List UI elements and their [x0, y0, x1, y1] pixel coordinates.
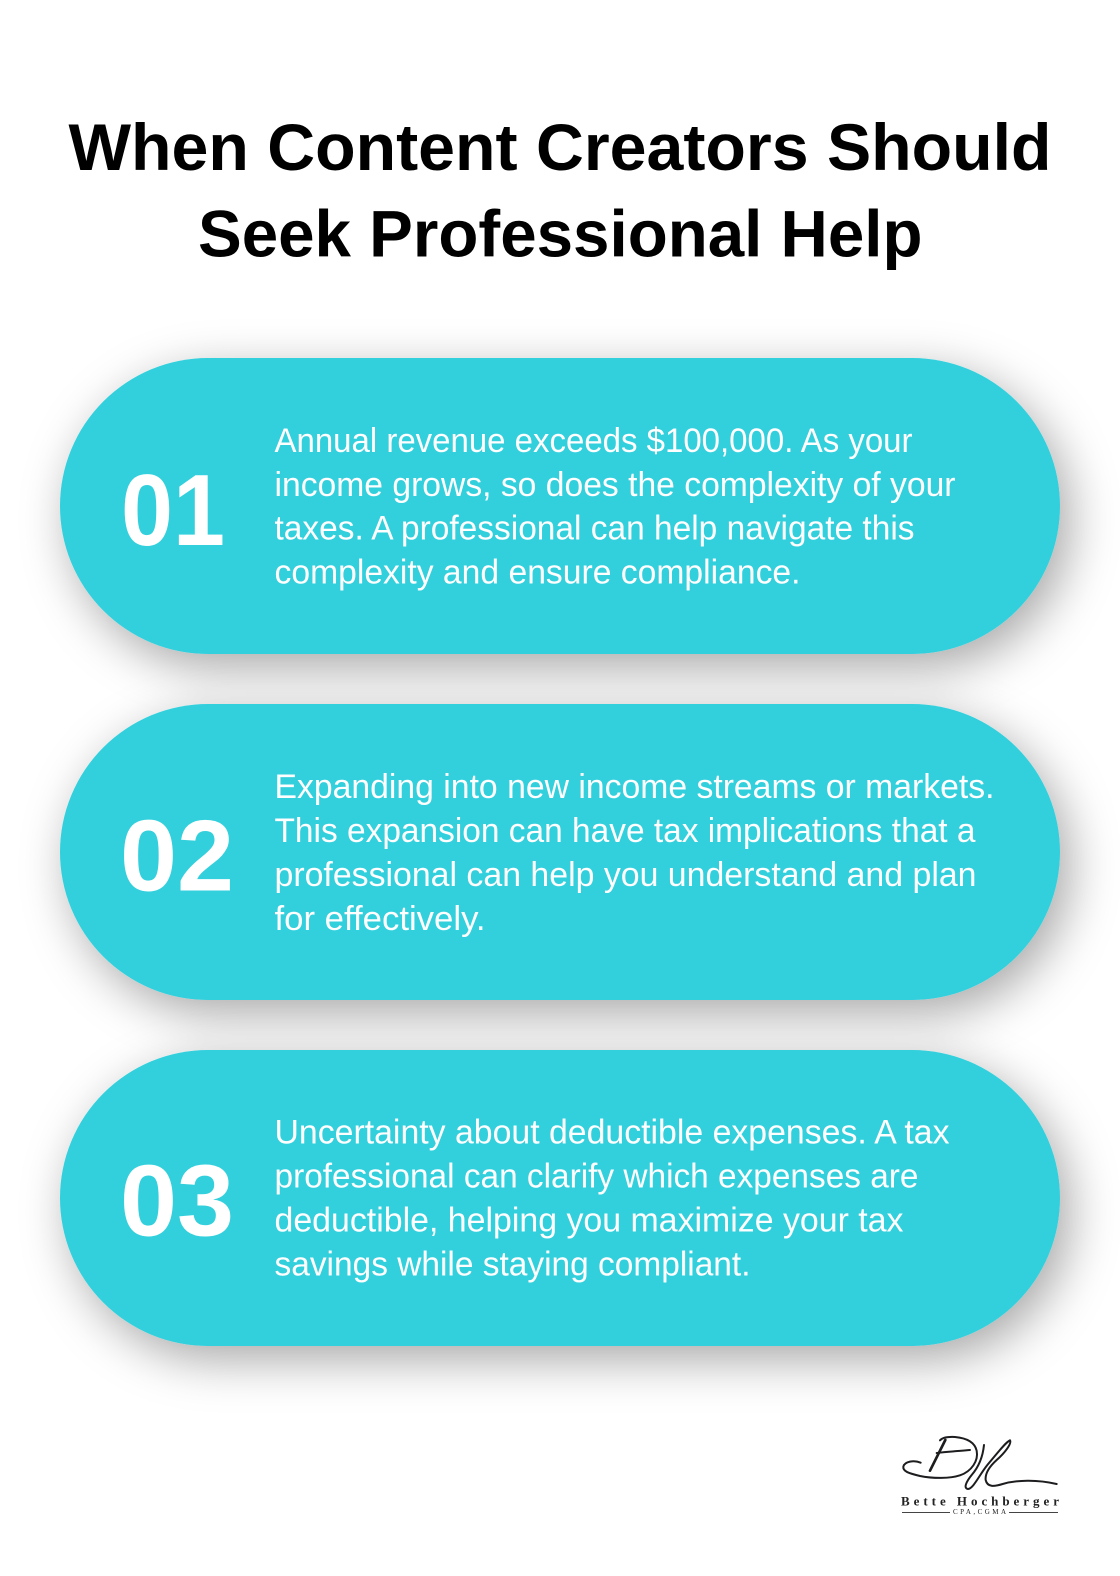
panel: step 03 [60, 1050, 1060, 1346]
logo: Bette Hochberger signature [901, 1437, 1059, 1516]
text block 02: for effectively. [274, 900, 486, 938]
text block 01: income grows, so does the complexity of your [274, 466, 956, 504]
icon: BH signature mark [903, 1437, 1057, 1489]
panel: step 01 [60, 358, 1060, 654]
title: When Content Creators Should [68, 111, 1052, 184]
pill background 02 [60, 704, 1060, 1000]
number 03: 03 [120, 1146, 234, 1258]
logo name: Bette Hochberger [901, 1494, 1059, 1508]
title [68, 111, 1052, 270]
text block 01 [274, 422, 956, 592]
text block 01: Annual revenue exceeds $100,000. As your [274, 422, 912, 460]
text block 02: Expanding into new income streams or markets. [274, 768, 994, 806]
pill background 03 [60, 1050, 1060, 1346]
title: Seek Professional Help [198, 198, 922, 270]
panel: step 02 [60, 704, 1060, 1000]
text block 03: savings while staying compliant. [274, 1246, 750, 1284]
text block 02: This expansion can have tax implications that a [274, 812, 976, 850]
text block 01: complexity and ensure compliance. [274, 554, 800, 592]
number 01: 01 [121, 455, 225, 567]
text block 02: professional can help you understand and plan [274, 856, 976, 894]
text block 03: professional can clarify which expenses are [274, 1158, 918, 1196]
pill background 01 [60, 358, 1060, 654]
text block 03: deductible, helping you maximize your tax [274, 1202, 904, 1240]
text block 03: Uncertainty about deductible expenses. A tax [274, 1114, 950, 1152]
text block 02 [274, 768, 994, 938]
text block 01: taxes. A professional can help navigate this [274, 510, 914, 548]
text block 03 [274, 1114, 950, 1284]
number 02: 02 [120, 800, 234, 912]
logo credentials: CPA,CGMA [953, 1508, 1006, 1516]
